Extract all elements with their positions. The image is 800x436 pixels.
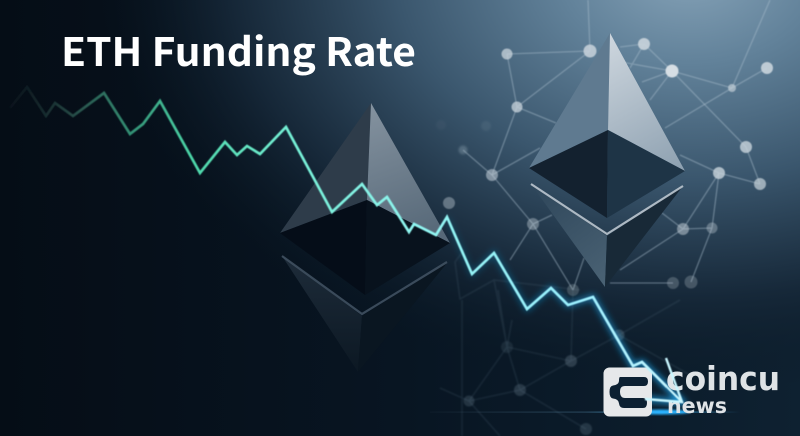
nodes: upper right bbox=[502, 48, 512, 60]
icon: large Ethereum diamond, right bbox=[529, 33, 685, 287]
chart glow bbox=[447, 217, 682, 402]
floor light line bbox=[430, 410, 740, 414]
blurred far nodes bbox=[436, 120, 491, 154]
nodes: lower dark area bbox=[565, 355, 577, 367]
wordmark: news: news bbox=[667, 394, 727, 418]
logo: coincu news bbox=[604, 359, 780, 418]
title: ETH Funding Rate bbox=[61, 22, 416, 78]
line chart: falling funding rate bbox=[10, 87, 682, 402]
network graph: upper right bbox=[443, 0, 773, 296]
icon: coincu logo bbox=[604, 368, 652, 416]
network graph: lower dark area bbox=[440, 250, 690, 436]
icon: faded Ethereum diamond, centre bbox=[280, 103, 450, 372]
wordmark: coincu: coincu bbox=[666, 359, 780, 398]
